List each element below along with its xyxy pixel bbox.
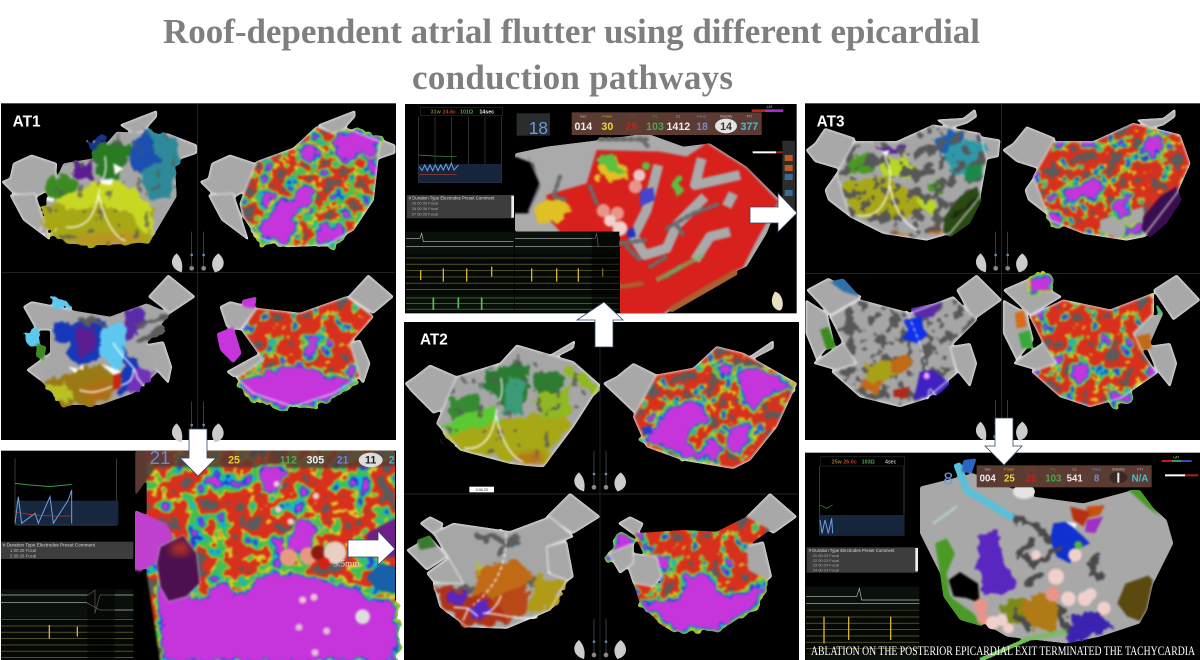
dashboard: electrogram traces — [406, 232, 514, 312]
dashboard: lesion table: 26 00:35 Focal — [412, 201, 438, 206]
catheter — [620, 255, 737, 310]
map: AT3 lower-right voltage — [1003, 275, 1200, 407]
legend bar — [752, 105, 786, 153]
ablation lesion spheres — [274, 481, 370, 656]
info bar: CL — [1072, 468, 1077, 472]
info bar: Temp — [627, 115, 636, 119]
timestamp label: 0:06.23 — [476, 488, 488, 492]
map: AT2 upper-right voltage — [603, 341, 797, 468]
info bar: Imp — [652, 115, 658, 119]
info bar: Stability — [720, 115, 733, 119]
info bar: 103 — [1045, 473, 1062, 484]
ablation readout row: 21 — [337, 454, 349, 466]
dashboard: readout chart: 25w — [832, 459, 843, 465]
dashboard: readout chart: 101Ω — [460, 110, 474, 116]
mini heart — [772, 292, 783, 311]
map: AT1 upper-left activation — [2, 111, 197, 245]
pathway arrows — [858, 136, 916, 229]
AT3 label: AT3 — [817, 114, 844, 131]
map: AT1 zoomed voltage map — [135, 451, 395, 660]
ablation readout row: 21 — [150, 447, 170, 468]
legend bar — [1162, 455, 1198, 476]
info bar: 18 — [696, 121, 708, 133]
info bar: 25 — [1004, 473, 1015, 484]
ablation readout row: 2 — [389, 454, 395, 466]
info bar: 1412 — [666, 121, 690, 133]
force box — [517, 113, 550, 138]
map: AT3 ablation gray map — [920, 458, 1173, 660]
dashboard: lesion table: 1 00:29 Focal — [10, 548, 36, 553]
map: AT2 lower-left activation — [407, 493, 600, 628]
ablation readout row: 305 — [306, 454, 324, 466]
info bar: 26 — [626, 121, 638, 133]
ablation readout row: 112 — [280, 454, 297, 466]
force box: 18 — [529, 118, 548, 138]
ablation lesion spheres — [973, 541, 1111, 634]
ablation readout row: 25 — [228, 454, 240, 466]
dashboard: readout chart: 103Ω — [862, 459, 876, 465]
info bar: FTI — [1137, 468, 1143, 472]
pathway arrows — [440, 359, 523, 462]
arrow: AT2 right — [750, 193, 797, 232]
panel: AT2 four-view activation maps — [404, 322, 799, 660]
arrow: AT3 down — [985, 418, 1022, 465]
side toolbar — [782, 141, 795, 211]
dashboard: readout chart: 14sec — [479, 110, 494, 116]
title: conduction pathways — [412, 58, 733, 97]
force value: 8 — [944, 468, 953, 488]
dashboard: power and temperature chart — [15, 458, 118, 525]
pathway arrows — [883, 294, 950, 402]
info bar: Force — [1092, 468, 1101, 472]
distance label: 3.5mm — [333, 560, 360, 570]
pathway arrows — [454, 524, 553, 620]
info bar: Stability — [1112, 468, 1125, 472]
panel: AT1 four-view activation maps — [1, 103, 396, 442]
ablation readout row — [150, 447, 395, 468]
dashboard: lesion table: 27 00:29 Focal — [412, 211, 438, 216]
map: AT3 upper-right voltage — [1003, 109, 1190, 240]
map: AT2 upper-left activation — [405, 341, 600, 467]
pathway arrows — [41, 140, 125, 241]
info bar: FTI — [747, 115, 752, 119]
dashboard: readout chart: 4sec — [885, 459, 897, 465]
info bar: N/A — [1132, 473, 1148, 484]
dashboard: lesion table: 23 00:24 Focal — [813, 563, 839, 568]
legend bar: LAT — [1173, 455, 1179, 459]
dashboard: readout chart: 31w — [431, 110, 442, 116]
map: AT1 lower-left activation — [19, 275, 195, 405]
map: AT3 lower-left activation — [806, 275, 1002, 407]
dashboard: lesion table: 26 00:36 Focal — [412, 206, 438, 211]
legend bar: LAT — [767, 105, 773, 109]
info bar: CL — [676, 115, 681, 119]
info bar: 26 — [1026, 473, 1037, 484]
panel: AT3 four-view activation maps — [805, 103, 1200, 441]
info bar: Force — [697, 115, 706, 119]
dashboard: lesion table: # Duration Type Electrodes Preset Comment — [409, 195, 495, 200]
title: Roof-dependent atrial flutter using different epicardial — [163, 12, 980, 51]
info bar: Sec — [580, 115, 587, 119]
dashboard: lesion table: # Duration Type Electrodes Preset Comment — [3, 542, 96, 547]
info bar: Imp — [1050, 468, 1056, 472]
dashboard: lesion table: 21 00:23 Focal — [813, 553, 839, 558]
dashboard: lesion table: 2 00:26 Focal — [10, 554, 36, 559]
arrow: AT1 down — [180, 429, 216, 476]
dashboard: readout chart — [418, 107, 502, 183]
scale controls and mini hearts — [574, 451, 626, 659]
info bar: 377 — [740, 121, 758, 133]
dashboard: lesion table — [407, 195, 514, 218]
map: AT3 upper-left activation — [806, 109, 1000, 240]
info bar: 004 — [980, 473, 996, 484]
dashboard: lesion table — [1, 542, 133, 559]
dashboard: readout chart: 24.6c — [443, 110, 456, 116]
scale controls and mini hearts — [172, 232, 224, 442]
scale controls and mini hearts — [976, 232, 1028, 441]
arrow: AT1 to right — [348, 531, 395, 565]
catheter and sheath — [933, 458, 1067, 660]
info bar: 8 — [1094, 473, 1100, 484]
dashboard: lesion table — [807, 547, 918, 573]
timestamp label — [469, 487, 494, 492]
map: AT2 ablation red map — [515, 133, 780, 313]
dashboard: lesion table: 22 00:23 Focal — [813, 558, 839, 563]
dashboard: electrogram traces — [1, 589, 133, 660]
panel: AT3 ablation view — [805, 453, 1200, 660]
dashboard: readout chart: 26.0c — [843, 459, 857, 465]
dashboard: electrogram traces second — [515, 232, 619, 312]
info bar: Power — [602, 115, 613, 119]
info bar — [572, 112, 762, 135]
title — [163, 12, 980, 97]
info bar: 014 — [574, 121, 592, 133]
info bar: Temp — [1027, 468, 1035, 472]
ablation readout row: 11 — [365, 454, 376, 466]
info bar: 103 — [646, 121, 664, 133]
ablation readout row: 24 — [256, 454, 268, 466]
dashboard: lesion table: 24 00:23 Focal — [813, 567, 839, 572]
dashboard: electrogram traces — [806, 587, 919, 660]
info bar: 14 — [720, 121, 732, 133]
map: AT1 upper-right voltage — [200, 111, 395, 247]
dashboard: lesion table: # Duration Type Electrodes Preset Comment — [809, 548, 895, 553]
info bar: 541 — [1067, 473, 1083, 484]
pathway arrows — [80, 302, 157, 392]
ablation lesion spheres — [597, 162, 650, 236]
info bar: Power — [1004, 468, 1015, 472]
AT2 label: AT2 — [420, 332, 448, 349]
map: AT2 lower-right voltage — [608, 493, 797, 630]
AT1 label: AT1 — [13, 114, 41, 131]
panel: AT1 ablation view — [1, 447, 396, 660]
info bar: 30 — [601, 121, 613, 133]
info bar — [977, 465, 1152, 487]
dashboard: readout chart — [819, 457, 905, 535]
map: AT1 lower-right voltage — [217, 275, 393, 407]
arrow: AT2 up — [577, 302, 623, 347]
info bar: Sec — [985, 468, 991, 472]
panel: AT2 ablation view — [405, 104, 797, 313]
